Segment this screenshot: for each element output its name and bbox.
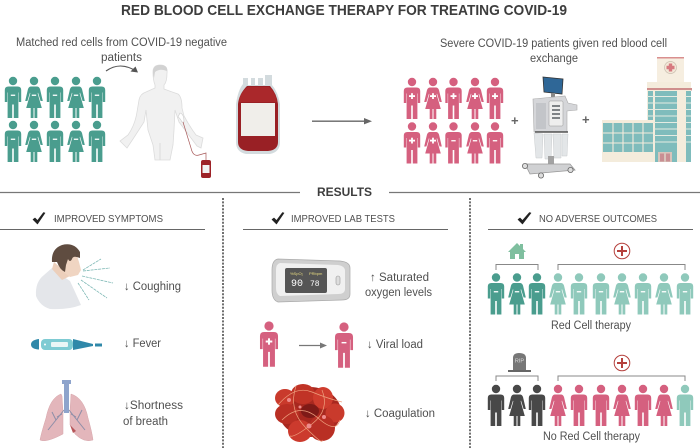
patient group: pink figures: [404, 78, 503, 164]
icon: small blood bag with tube: [183, 122, 211, 178]
text: saturated oxygen levels: [365, 272, 432, 299]
text: red cell therapy: Red Cell therapy: [551, 320, 631, 332]
heading: no adverse outcomes: NO ADVERSE OUTCOMES: [539, 213, 657, 225]
bracket: discharged: [496, 264, 538, 270]
icon: plus sign: +: [511, 113, 519, 128]
arrow: viral load: [299, 342, 327, 348]
icon: gravestone: RIP: [515, 358, 524, 364]
text: coagulation: ↓ Coagulation: [365, 408, 435, 420]
heading: improved lab tests: IMPROVED LAB TESTS: [291, 213, 395, 225]
panel: no adverse outcomes: [488, 212, 693, 443]
donor group: green figures: [5, 77, 105, 162]
panel: improved lab tests: [243, 212, 448, 442]
icon: blood clot: [275, 384, 344, 442]
icon: apheresis machine: [522, 77, 577, 178]
figures: no red cell therapy: [488, 385, 693, 426]
caption: severe patients: exchange: [530, 53, 578, 65]
icon: hospital: [602, 57, 692, 162]
heading: improved lab tests: [243, 212, 448, 230]
icon: gravestone: [508, 353, 531, 372]
icon: home: [508, 243, 526, 259]
text: saturated oxygen levels: ↑ Saturated: [370, 272, 429, 284]
caption: severe patients: [440, 38, 667, 65]
icon: pulse oximeter: [272, 259, 350, 302]
icon: lungs: [40, 380, 93, 441]
text: no red cell therapy: No Red Cell therapy: [543, 431, 640, 443]
panel: improved symptoms: [0, 212, 205, 441]
icon: pulse oximeter: %SpO₂: [290, 271, 304, 276]
bracket: died: [496, 376, 538, 381]
text: fever: ↓ Fever: [124, 338, 161, 350]
icon: pulse oximeter: PRbpm: [309, 271, 323, 276]
heading: no adverse outcomes: [488, 212, 693, 230]
caption: severe patients: Severe COVID-19 patients given red blood cell: [440, 38, 667, 50]
arrow: curved donor arrow: [106, 66, 138, 72]
icon: thermometer: [31, 339, 102, 350]
caption: matched red cells: patients: [101, 52, 142, 64]
caption: matched red cells: [16, 37, 227, 64]
caption: matched red cells: Matched red cells from COVID-19 negative: [16, 37, 227, 49]
icon: viral load figures: [260, 321, 353, 368]
text: shortness of breath: ↓Shortness: [124, 400, 183, 412]
icon: coughing person: [36, 244, 113, 309]
text: shortness of breath: [123, 400, 183, 428]
results heading: RESULTS: [317, 185, 372, 199]
text: shortness of breath: of breath: [123, 416, 168, 428]
icon: donor body: [120, 65, 203, 160]
bracket: hospitalised: [558, 264, 685, 270]
icon: hospital cross: [614, 355, 630, 371]
figures: red cell therapy: [488, 273, 693, 314]
icon: plus sign: +: [582, 112, 590, 127]
text: viral load: ↓ Viral load: [367, 339, 423, 351]
text: coughing: ↓ Coughing: [124, 281, 181, 293]
icon: blood bag: [236, 75, 280, 154]
title: RED BLOOD CELL EXCHANGE THERAPY FOR TREATING COVID-19: [121, 2, 567, 19]
bracket: hospitalised: [558, 376, 685, 381]
arrow: process: [312, 118, 372, 124]
icon: pulse oximeter: 78: [310, 280, 320, 289]
heading: improved symptoms: IMPROVED SYMPTOMS: [54, 213, 163, 225]
icon: pulse oximeter: 90: [291, 279, 303, 290]
heading: improved symptoms: [0, 212, 205, 230]
text: saturated oxygen levels: oxygen levels: [365, 287, 432, 299]
icon: hospital cross: [614, 243, 630, 259]
